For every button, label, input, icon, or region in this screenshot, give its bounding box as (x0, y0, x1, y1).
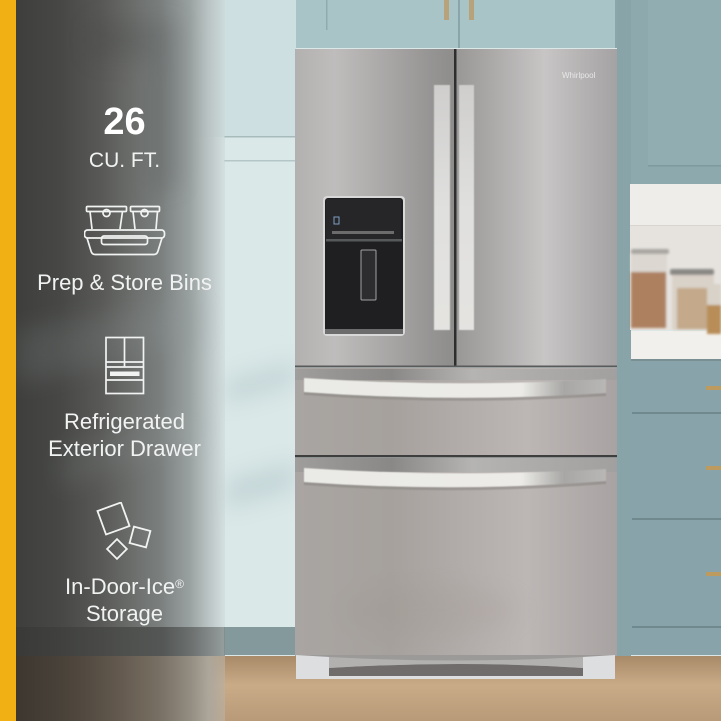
label: in-door-ice storage (65, 574, 184, 626)
refrigerator (295, 49, 617, 679)
door handles (434, 85, 474, 330)
feature column (37, 101, 212, 626)
icon: ice cubes (96, 502, 152, 560)
water and ice dispenser (323, 196, 405, 336)
icon: french door refrigerator (105, 336, 144, 394)
base tint under panel (16, 627, 225, 656)
yellow side bar (0, 0, 16, 721)
storage jars (631, 249, 721, 334)
logo: Whirlpool (562, 71, 596, 80)
wood floor tint under panel (16, 656, 225, 721)
wood floor (0, 656, 721, 721)
dark gradient panel (16, 0, 225, 721)
doors (295, 49, 617, 368)
capacity unit: CU. FT. (89, 149, 160, 172)
label: refrigerated exterior drawer (48, 409, 201, 461)
icon: storage bins (84, 206, 166, 256)
label: refrigerated exterior drawer: Exterior Drawer (48, 436, 201, 461)
label: refrigerated exterior drawer: Refrigerated (64, 409, 185, 434)
upper cabinets (296, 0, 621, 48)
kick plate (296, 655, 615, 679)
lower cabinets (631, 361, 721, 655)
right wall, backsplash and counter (617, 0, 721, 660)
label: in-door-ice storage: Storage (86, 601, 163, 626)
label: in-door-ice storage: In-Door-Ice® (65, 574, 184, 599)
drawers (295, 368, 617, 656)
floor reflection (340, 585, 520, 635)
drawer handles (304, 378, 606, 490)
capacity number: 26 (103, 101, 146, 143)
label: prep and store bins: Prep & Store Bins (37, 270, 212, 295)
